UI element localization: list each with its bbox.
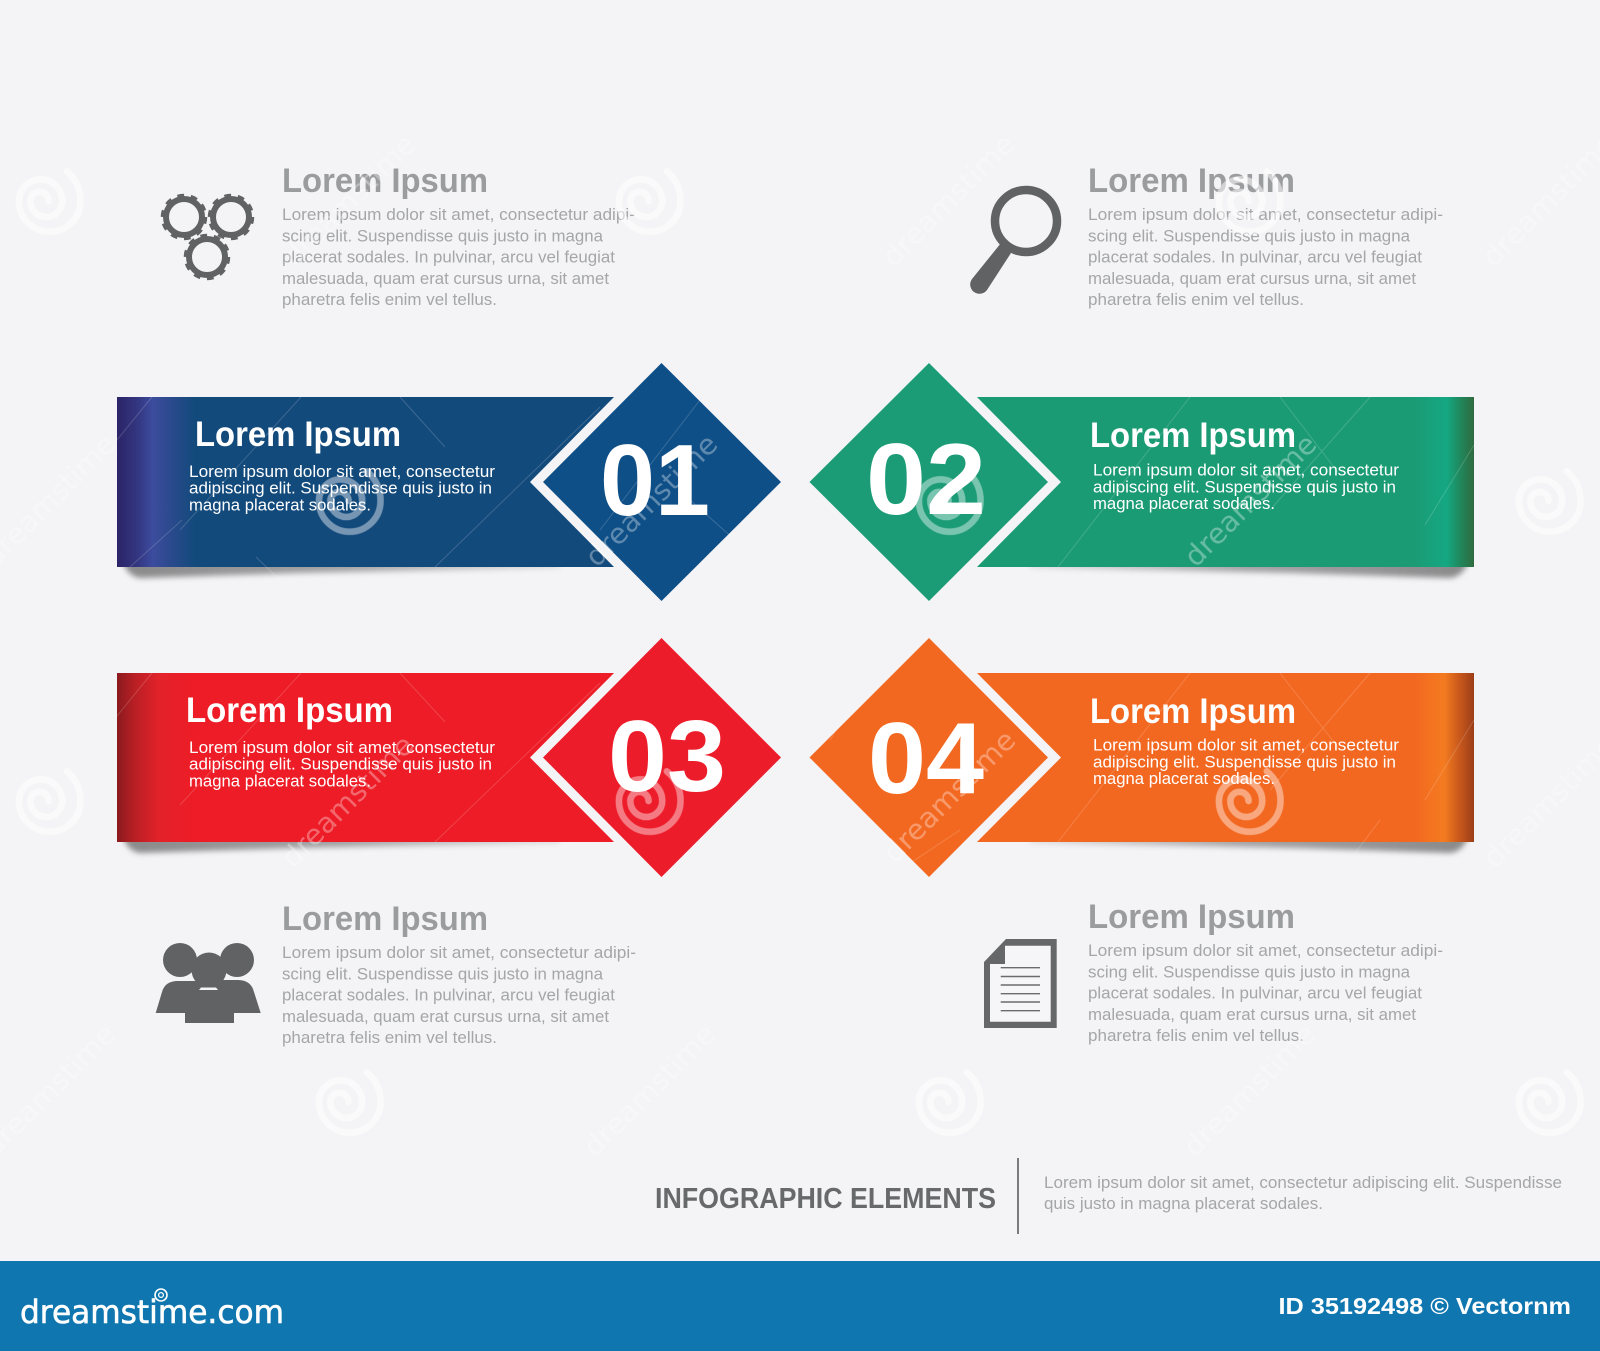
title block (655, 1158, 1562, 1234)
title description: Lorem ipsum dolor sit amet, consectetur adipiscing elit. Suspendisse (1044, 1174, 1562, 1192)
ribbon shadow (122, 833, 560, 853)
icon: people (156, 943, 261, 1023)
heading: Lorem Ipsum (186, 691, 393, 730)
heading: Lorem Ipsum (282, 162, 488, 200)
text block: pharetra felis enim vel tellus. (282, 291, 497, 309)
text block: Lorem ipsum dolor sit amet, consectetur (189, 462, 495, 481)
watermark overlay: dreamstime (275, 729, 420, 874)
diamond (543, 638, 781, 877)
panel: ribbon 02 (810, 363, 1474, 601)
watermark overlay: dreamstime (579, 428, 724, 573)
text block: scing elit. Suspendisse quis justo in magna (1088, 227, 1411, 245)
panel: top right note (970, 162, 1443, 309)
watermark overlay: dreamstime (577, 1018, 722, 1163)
ribbon band (977, 397, 1474, 567)
heading: Lorem Ipsum (1088, 898, 1295, 936)
panel: ribbon 04 (810, 638, 1474, 877)
icon: gears (162, 196, 252, 278)
panel: top left note (162, 162, 635, 309)
title: INFOGRAPHIC ELEMENTS (655, 1183, 996, 1215)
text block: placerat sodales. In pulvinar, arcu vel feugiat (1088, 249, 1422, 267)
icon: magnifier (970, 190, 1057, 294)
footer credit: ID 35192498 © Vectornm (1278, 1293, 1571, 1319)
text block: Lorem ipsum dolor sit amet, consectetur adipi- (282, 206, 635, 224)
text block: adipiscing elit. Suspendisse quis justo in (189, 755, 492, 774)
text block: Lorem ipsum dolor sit amet, consectetur (189, 738, 495, 757)
text block: magna placerat sodales. (189, 495, 371, 514)
ribbon band (117, 397, 614, 567)
watermark overlay: dreamstime (1178, 428, 1323, 573)
text block: adipiscing elit. Suspendisse quis justo in (189, 479, 492, 498)
watermark overlay: dreamstime (876, 128, 1021, 273)
text block: malesuada, quam erat cursus urna, sit amet (282, 270, 609, 288)
text block: Lorem ipsum dolor sit amet, consectetur adipi- (1088, 206, 1443, 224)
text block: pharetra felis enim vel tellus. (1088, 1027, 1304, 1045)
heading: Lorem Ipsum (282, 900, 488, 938)
panel: ribbon 03 (117, 638, 781, 877)
watermark overlay (0, 128, 1600, 1163)
text block: placerat sodales. In pulvinar, arcu vel feugiat (282, 987, 615, 1005)
icon: document (984, 939, 1057, 1028)
title description (1044, 1174, 1562, 1213)
footer band (0, 1261, 1600, 1351)
text block (189, 738, 495, 790)
text block: malesuada, quam erat cursus urna, sit amet (282, 1008, 609, 1026)
text block: scing elit. Suspendisse quis justo in magna (282, 965, 604, 983)
text block (1088, 942, 1443, 1045)
text block (1088, 206, 1443, 309)
panel: bottom right note (984, 898, 1443, 1045)
text block (282, 944, 636, 1047)
ribbon shadow (122, 558, 560, 578)
ribbon shadow (1030, 833, 1469, 853)
text block: adipiscing elit. Suspendisse quis justo in (1093, 752, 1396, 771)
text block (282, 206, 635, 309)
text block: Lorem ipsum dolor sit amet, consectetur adipi- (282, 944, 636, 962)
text block: Lorem ipsum dolor sit amet, consectetur (1093, 736, 1399, 755)
text block (1093, 461, 1399, 513)
diamond (810, 638, 1048, 877)
footer logo: dreamstime.com (20, 1293, 284, 1331)
text block: magna placerat sodales. (1093, 769, 1275, 788)
text block: pharetra felis enim vel tellus. (1088, 291, 1304, 309)
number: 04 (868, 703, 984, 815)
heading: Lorem Ipsum (1090, 692, 1296, 731)
title description: quis justo in magna placerat sodales. (1044, 1195, 1323, 1213)
text block (1093, 736, 1399, 788)
panel: ribbon 01 (117, 363, 781, 601)
watermark overlay: dreamstime (877, 724, 1022, 869)
number: 03 (608, 701, 726, 813)
text block: malesuada, quam erat cursus urna, sit amet (1088, 270, 1416, 288)
text block: magna placerat sodales. (1093, 494, 1275, 513)
text block: magna placerat sodales. (189, 771, 371, 790)
text block: Lorem ipsum dolor sit amet, consectetur adipi- (1088, 942, 1443, 960)
ribbon band (977, 673, 1474, 842)
text block: placerat sodales. In pulvinar, arcu vel feugiat (282, 249, 615, 267)
watermark overlay: dreamstime (277, 128, 422, 273)
text block: Lorem ipsum dolor sit amet, consectetur (1093, 461, 1399, 480)
heading: Lorem Ipsum (1090, 416, 1296, 455)
text block (189, 462, 495, 514)
watermark overlay: dreamstime (1177, 1018, 1322, 1163)
ribbon band (117, 673, 614, 842)
text block: placerat sodales. In pulvinar, arcu vel feugiat (1088, 985, 1422, 1003)
number: 01 (600, 425, 710, 537)
number: 02 (866, 424, 986, 536)
diamond (810, 363, 1048, 601)
heading: Lorem Ipsum (1088, 162, 1295, 200)
ribbon shadow (1030, 558, 1469, 578)
heading: Lorem Ipsum (195, 415, 401, 454)
diamond (543, 363, 781, 601)
text block: scing elit. Suspendisse quis justo in magna (1088, 963, 1411, 981)
text block: adipiscing elit. Suspendisse quis justo in (1093, 477, 1396, 496)
text block: scing elit. Suspendisse quis justo in magna (282, 227, 604, 245)
panel: bottom left note (156, 900, 636, 1047)
text block: pharetra felis enim vel tellus. (282, 1029, 497, 1047)
text block: malesuada, quam erat cursus urna, sit amet (1088, 1006, 1416, 1024)
